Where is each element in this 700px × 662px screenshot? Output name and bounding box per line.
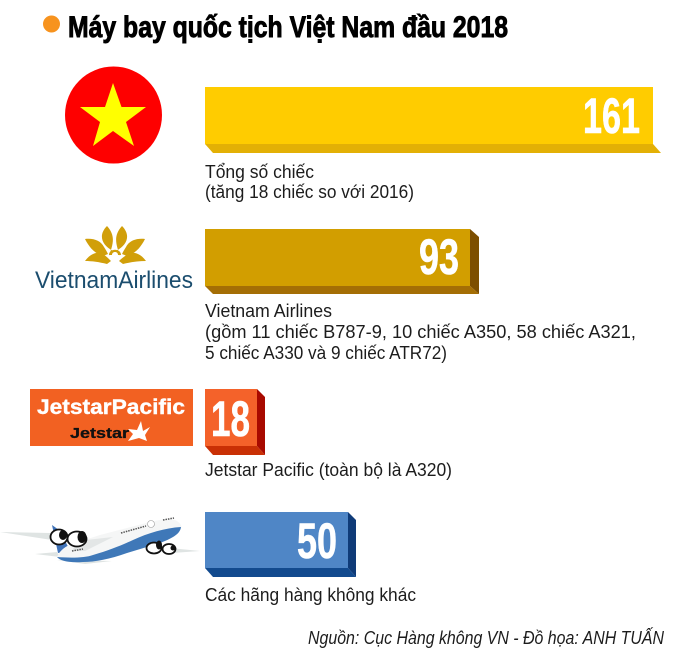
text: other airlines caption: Các hãng hàng không khác <box>205 585 416 605</box>
bar: 50 <box>205 512 356 577</box>
text: Vietnam Airlines caption: (gồm 11 chiếc B787-9, 10 chiếc A350, 58 chiếc A321, <box>205 322 636 342</box>
text: Vietnam Airlines caption <box>205 301 636 363</box>
icon: Vietnam Airlines logo <box>35 226 193 294</box>
panel: Jetstar Pacific <box>30 389 452 480</box>
source credit: Nguồn: Cục Hàng không VN - Đồ họa: ANH TUẤN <box>308 627 665 648</box>
bar: 93: 93 <box>419 229 459 285</box>
text: total caption <box>205 162 414 202</box>
text: Vietnam Airlines caption: 5 chiếc A330 và 9 chiếc ATR72) <box>205 343 447 363</box>
bar: 161: 161 <box>583 88 640 144</box>
bar: 93 <box>205 229 479 294</box>
panel: total fleet <box>65 66 661 202</box>
icon: Vietnam Airlines logo: VietnamAirlines <box>35 267 193 294</box>
bar: 50: 50 <box>297 513 337 569</box>
icon: Jetstar Pacific logo: JetstarPacific <box>37 396 185 419</box>
bar: 18: 18 <box>211 391 250 447</box>
text: Vietnam Airlines caption: Vietnam Airlines <box>205 301 332 321</box>
bar: 161 <box>205 87 661 153</box>
text: total caption: (tăng 18 chiếc so với 2016) <box>205 182 414 202</box>
text: Jetstar caption: Jetstar Pacific (toàn bộ là A320) <box>205 460 452 480</box>
icon: airplane <box>0 518 200 564</box>
icon: Jetstar Pacific logo <box>30 389 193 446</box>
text: total caption: Tổng số chiếc <box>205 162 314 182</box>
icon: Vietnam flag circle <box>65 66 162 164</box>
icon: Jetstar Pacific logo: Jetstar <box>70 425 129 442</box>
title: Máy bay quốc tịch Việt Nam đầu 2018 <box>68 11 508 44</box>
panel: Vietnam Airlines <box>35 226 636 363</box>
panel: other airlines <box>0 512 416 605</box>
